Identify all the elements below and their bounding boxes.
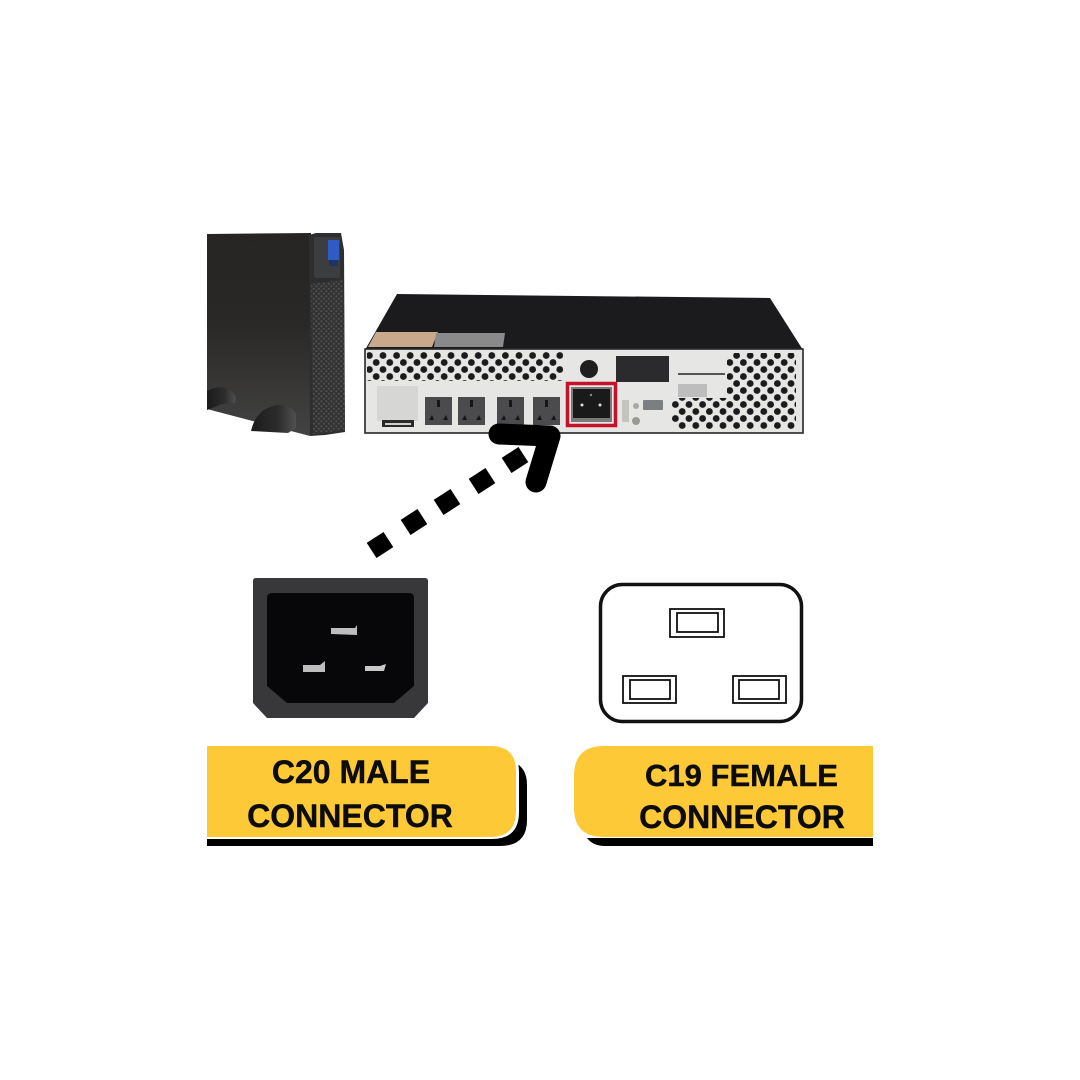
C19 female connector diagram [600, 584, 802, 722]
label shadow [207, 760, 527, 846]
power switch [580, 360, 598, 378]
vent holes right [727, 353, 796, 429]
label stickers [368, 332, 505, 347]
tower front face [207, 233, 311, 436]
arrow dashes [367, 447, 528, 558]
tower mesh grille [311, 280, 345, 434]
rack top face [365, 294, 803, 350]
rack UPS unit [365, 294, 803, 433]
label shadow [587, 838, 873, 846]
connector housing [253, 578, 428, 718]
red highlight box [568, 384, 616, 426]
label fill [574, 746, 873, 837]
label text line 1: C20 MALE [272, 754, 430, 790]
spec label [678, 384, 707, 397]
right pin [365, 664, 386, 671]
tower display [314, 237, 340, 278]
dashed arrow [367, 434, 550, 558]
outlet block [377, 386, 560, 427]
C19 label [574, 746, 873, 846]
tower side panel [309, 233, 345, 436]
right slot [733, 676, 786, 703]
label text line 2: CONNECTOR [639, 799, 845, 835]
top slot [670, 609, 724, 637]
tower UPS unit [207, 233, 345, 436]
serial port [622, 400, 663, 425]
arrow head [499, 434, 550, 482]
spec text strip [678, 373, 725, 375]
C20 label [207, 746, 527, 846]
C20 male connector photo [253, 578, 428, 718]
left foot [207, 387, 236, 410]
right foot [251, 405, 296, 433]
rack rear panel [365, 349, 803, 433]
label white edge [207, 746, 519, 839]
left pin [303, 661, 325, 672]
label text line 2: CONNECTOR [247, 798, 453, 834]
vent holes lower [672, 398, 727, 429]
vent holes left [367, 352, 563, 381]
label text line 1: C19 FEMALE [645, 758, 838, 793]
top pin [331, 625, 357, 635]
outline [600, 584, 802, 722]
label fill [207, 746, 516, 837]
C20 inlet [571, 387, 612, 422]
left slot [623, 676, 676, 703]
black cover plate [616, 356, 669, 382]
connector recess [267, 593, 414, 703]
